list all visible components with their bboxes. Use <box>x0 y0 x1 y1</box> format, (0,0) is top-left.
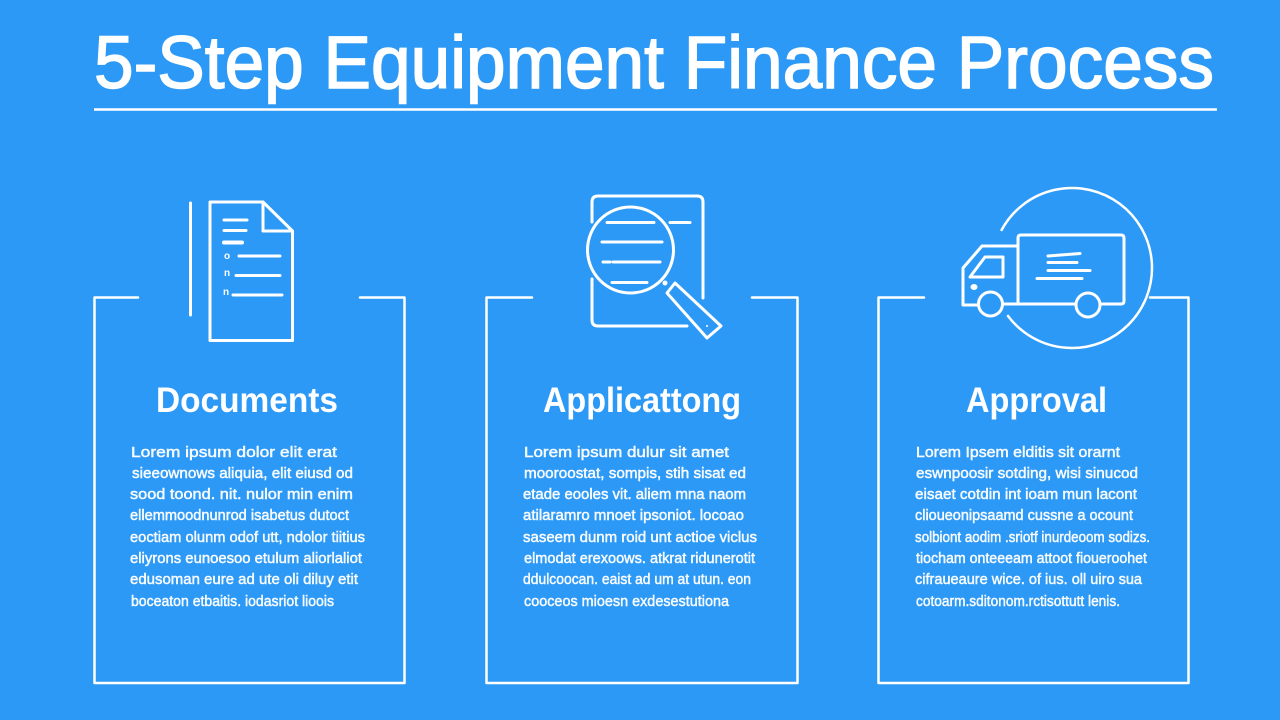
panel: documents <box>94 202 404 683</box>
icon: document: n <box>224 268 230 279</box>
text block: application: cooceos mioesn exdesestutiona <box>524 593 730 610</box>
panel: application <box>486 196 798 683</box>
text block: documents: eoctiam olunm odof utt, ndolor tiitius <box>130 529 365 546</box>
text block: approval: tiocham onteeeam attoot fioueroohet <box>916 550 1148 567</box>
text block: application: atilaramro mnoet ipsoniot. locoao <box>523 507 744 524</box>
text block: documents: boceaton etbaitis. iodasriot lioois <box>131 593 334 610</box>
text block: documents: Lorem ipsum dolor elit erat <box>131 444 338 461</box>
text block: documents: sood toond. nit. nulor min enim <box>130 486 353 503</box>
text block: application: mooroostat, sompis, stih sisat ed <box>524 465 746 482</box>
panel frame: approval <box>878 298 1188 683</box>
text block: approval <box>915 444 1150 610</box>
text block: documents: eliyrons eunoesoo etulum aliorlaliot <box>130 550 363 567</box>
panel frame: application <box>486 298 798 683</box>
text block: approval: solbiont aodim .sriotf inurdeoom sodizs. <box>915 529 1150 546</box>
text block: approval: cotoarm.sditonom.rctisottutt lenis. <box>916 593 1120 610</box>
heading: documents: Documents <box>156 381 338 420</box>
heading: application: Applicattong <box>543 381 741 420</box>
text block: documents <box>130 444 365 610</box>
title: 5-Step Equipment Finance Process <box>94 21 1214 104</box>
icon: document: o <box>224 251 230 262</box>
text block: approval: eswnpoosir sotding, wisi sinucod <box>916 465 1138 482</box>
heading: approval: Approval <box>966 381 1107 420</box>
text block: documents: edusoman eure ad ute oli diluy etit <box>130 571 359 588</box>
text block: application: saseem dunm roid unt actioe viclus <box>523 529 757 546</box>
text block: application: etade eooles vit. aliem mna naom <box>523 486 746 503</box>
text block: approval: clioueonipsaamd cussne a ocount <box>915 507 1134 524</box>
text block: documents: ellemmoodnunrod isabetus dutoct <box>130 507 350 524</box>
text block: approval: cifraueaure wice. of ius. oll uiro sua <box>915 571 1143 588</box>
icon: magnifier over document <box>588 196 721 338</box>
text block: approval: Lorem Ipsem elditis sit orarnt <box>916 444 1121 461</box>
panel: approval <box>878 188 1188 683</box>
icon: document: n <box>223 287 229 298</box>
text block: application: ddulcoocan. eaist ad um at utun. eon <box>523 571 751 588</box>
icon: delivery truck in circle <box>963 188 1152 348</box>
text block: application <box>523 444 757 610</box>
text block: approval: eisaet cotdin int ioam mun lacont <box>915 486 1138 503</box>
text block: application: elmodat erexoows. atkrat ridunerotit <box>524 550 756 567</box>
text block: documents: sieeownows aliquia, elit eiusd od <box>132 465 353 482</box>
icon: document <box>190 202 292 340</box>
text block: application: Lorem ipsum dulur sit amet <box>524 444 730 461</box>
panel frame: documents <box>94 298 404 683</box>
